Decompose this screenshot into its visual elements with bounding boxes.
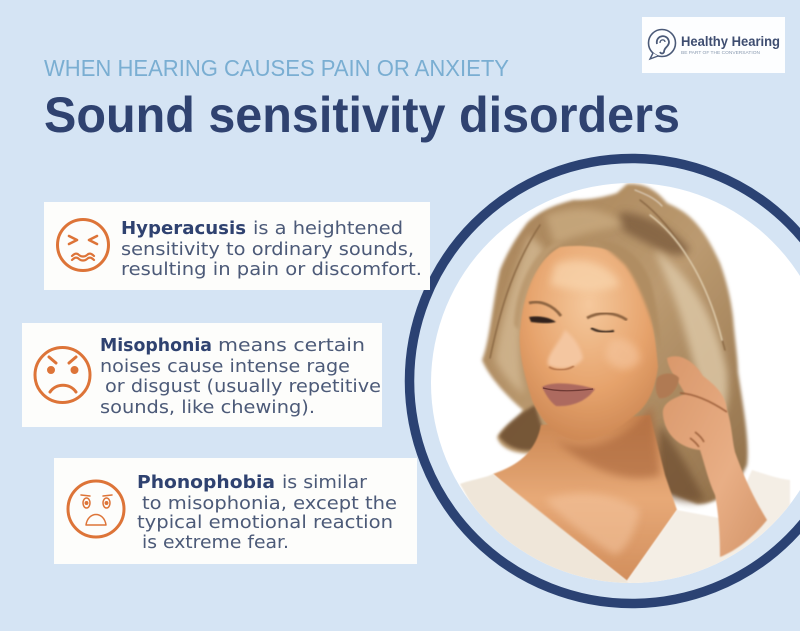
subtitle: WHEN HEARING CAUSES PAIN OR ANXIETY (44, 55, 509, 81)
hair highlight right (655, 250, 728, 425)
text: hyperacusis: is a heightened (253, 219, 403, 239)
lips (542, 383, 595, 406)
right eye (591, 328, 614, 332)
face (520, 246, 658, 440)
text: phonophobia: is similar (282, 473, 368, 493)
text: hyperacusis (121, 218, 422, 280)
shirt right (627, 470, 790, 590)
icon: pained face (58, 220, 108, 270)
photo white disc (431, 183, 800, 583)
panel: hyperacusis (44, 202, 430, 290)
text: phonophobia: typical emotional reaction (137, 513, 393, 533)
chest highlight (545, 493, 640, 555)
text: hyperacusis: Hyperacusis (121, 218, 246, 239)
panel: misophonia (22, 323, 382, 427)
text: phonophobia: Phonophobia (137, 472, 275, 493)
panel: phonophobia (54, 458, 417, 564)
title: Sound sensitivity disorders (44, 87, 680, 143)
cheek glow (605, 339, 640, 369)
text: phonophobia (137, 472, 397, 553)
text: misophonia: means certain (218, 336, 365, 356)
icon: fearful face (68, 481, 124, 537)
nose (548, 330, 583, 369)
text: misophonia: or disgust (usually repetitive (105, 377, 381, 397)
face left hair edge (514, 244, 556, 328)
hair back (482, 184, 748, 504)
shirt left (460, 474, 630, 583)
finger creases (680, 393, 727, 447)
hair top shadow (618, 212, 690, 255)
chest and neck (493, 415, 677, 581)
text: hyperacusis: sensitivity to ordinary sounds, (121, 240, 414, 260)
photo navy ring (410, 158, 800, 604)
text: phonophobia: is extreme fear. (142, 533, 289, 553)
forearm and hand (663, 356, 767, 557)
logo (642, 17, 785, 73)
left eyebrow (529, 302, 561, 316)
text: misophonia: noises cause intense rage (100, 357, 350, 377)
hair top highlight (545, 208, 625, 245)
hair strands (490, 190, 725, 358)
text: misophonia (100, 335, 381, 418)
right eyebrow (587, 313, 627, 320)
hair over forehead right (605, 248, 658, 332)
ear (656, 374, 679, 398)
icon: angry face (35, 348, 90, 402)
logo name: Healthy Hearing (681, 34, 780, 49)
hair lower left dark (499, 405, 548, 450)
forehead glow (550, 261, 620, 291)
hair lower right dark (655, 425, 705, 502)
text: misophonia: sounds, like chewing). (100, 398, 315, 418)
logo tagline: BE PART OF THE CONVERSATION (681, 50, 760, 55)
neck shadow (555, 405, 660, 478)
left eye (529, 316, 556, 323)
text: phonophobia: to misophonia, except the (142, 494, 397, 514)
text: hyperacusis: resulting in pain or discomfort. (121, 260, 422, 280)
text: misophonia: Misophonia (100, 335, 212, 356)
hair highlight left (495, 235, 545, 395)
photo: woman covering ear in circular frame (410, 158, 800, 604)
icon: ear speech bubble (648, 30, 676, 59)
